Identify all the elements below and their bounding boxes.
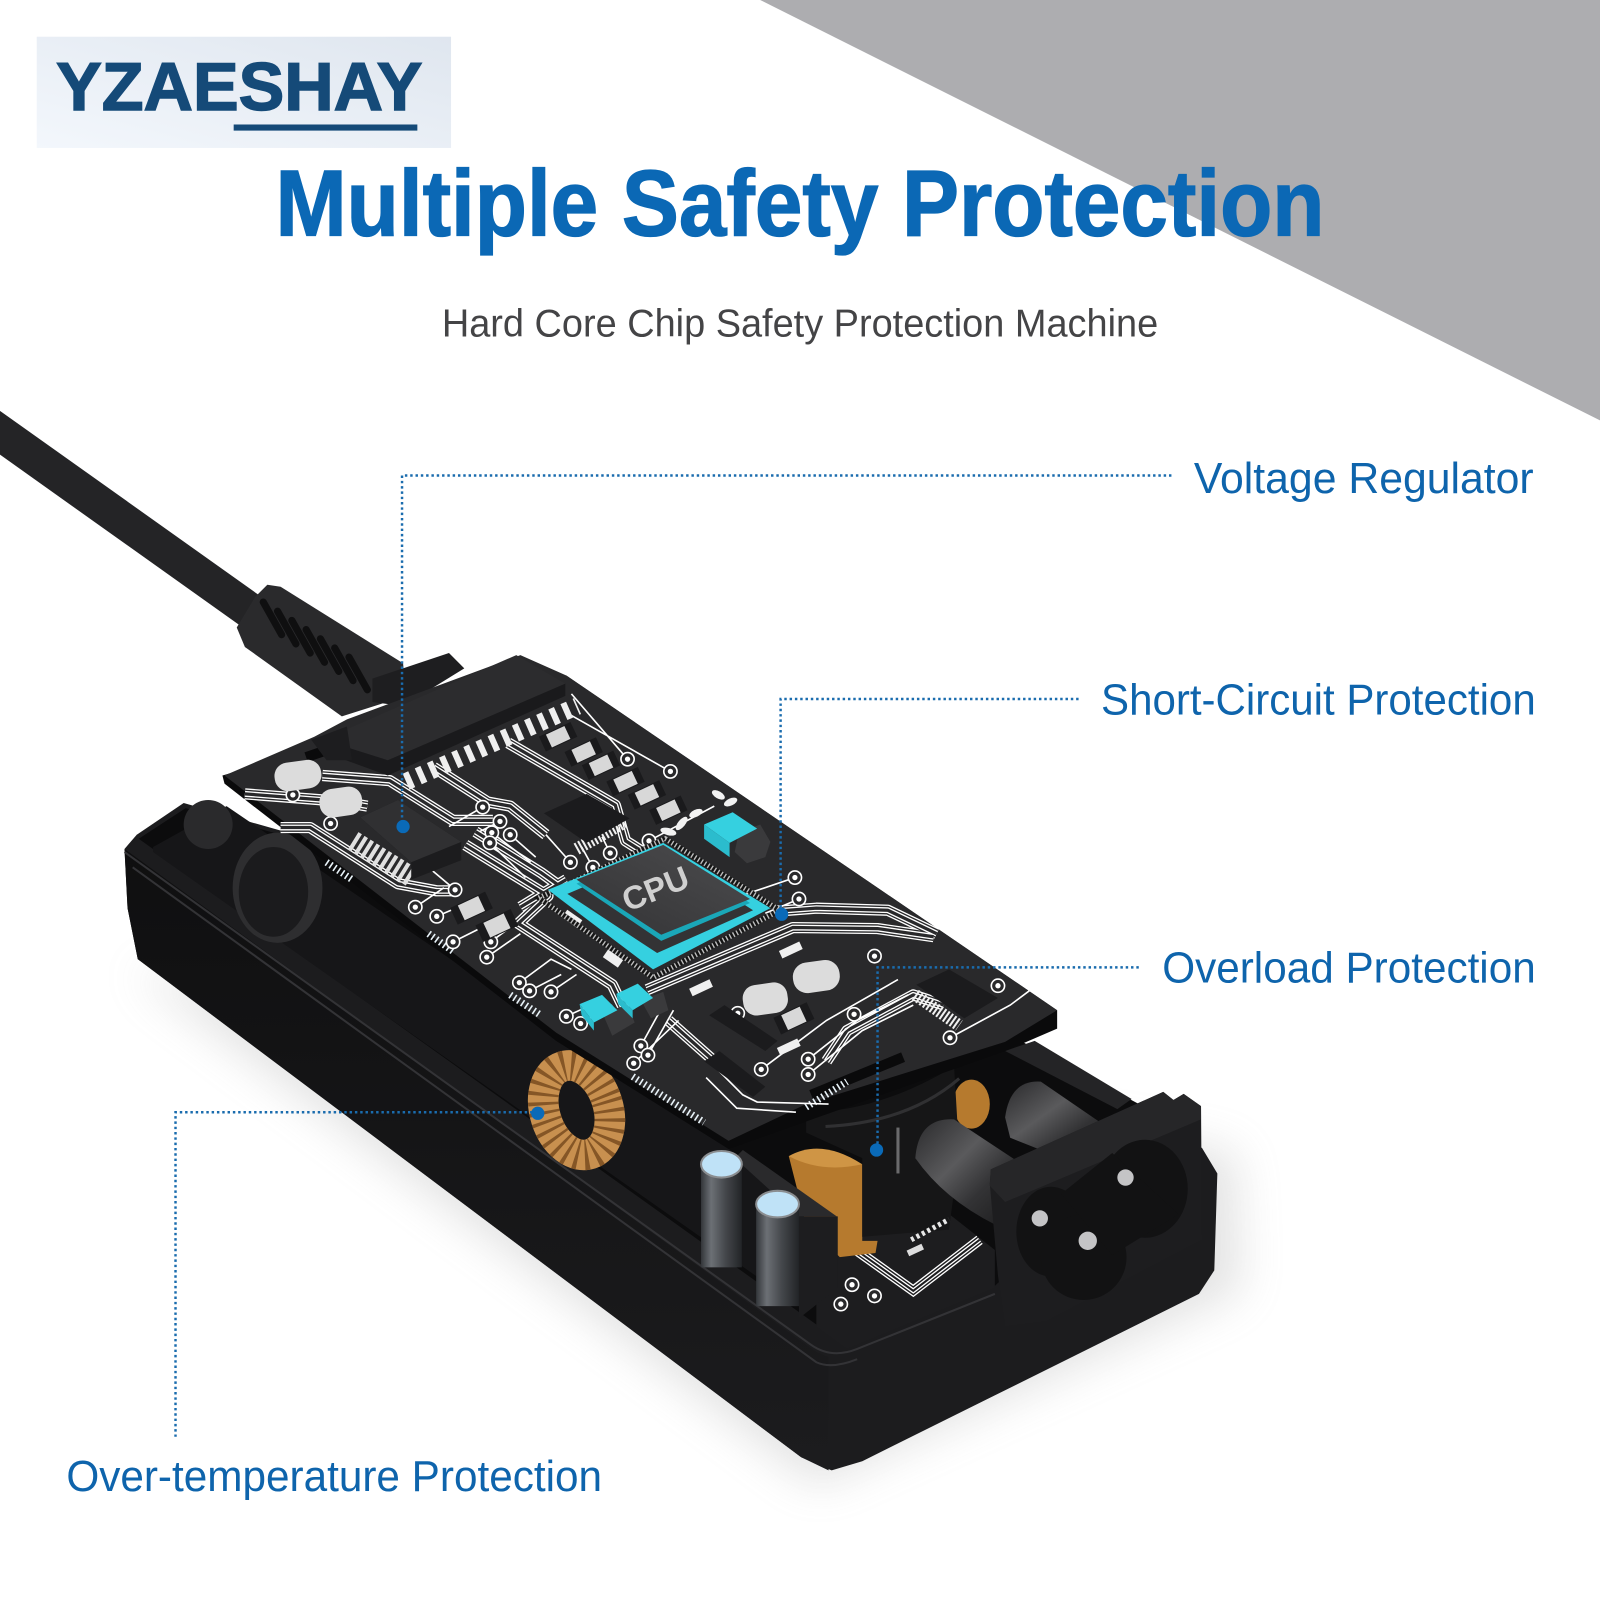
divider wall front — [799, 1216, 838, 1318]
socket pins — [1032, 1169, 1134, 1250]
circuit board top surface — [224, 655, 1057, 1141]
callout: voltage regulator: Voltage Regulator — [1194, 454, 1534, 503]
circuit board pads — [286, 753, 1005, 1081]
small white board pads — [562, 910, 803, 1055]
left tab on board — [311, 727, 352, 760]
subtitle: Hard Core Chip Safety Protection Machine — [442, 303, 1158, 346]
case rim line — [124, 852, 995, 1365]
case cavity — [139, 808, 1173, 1345]
bus traces on circuit board — [245, 743, 944, 1061]
device: power adapter cutaway — [0, 426, 1240, 1485]
adapter case body — [124, 803, 1217, 1470]
power cable — [0, 426, 255, 614]
electrolytic capacitors — [701, 1151, 799, 1306]
callout: overload protection: Overload Protection — [1162, 944, 1536, 993]
CPU label: CPU — [616, 858, 694, 919]
callout: short-circuit protection — [775, 675, 1536, 921]
main connector block — [346, 655, 578, 782]
case left face — [124, 849, 829, 1470]
low board components — [704, 1005, 778, 1097]
case inner wall — [153, 806, 806, 1311]
rear right case rail — [1005, 1041, 1132, 1109]
callout: over-temperature protection — [66, 1107, 602, 1501]
orange capacitor — [789, 1149, 878, 1257]
small surface mount parts left — [450, 892, 814, 1034]
background grey triangle — [760, 0, 1600, 420]
socket clover opening — [1016, 1140, 1188, 1300]
callout: voltage regulator — [396, 454, 1534, 833]
socket plate — [990, 1092, 1202, 1327]
lower board inside case — [816, 1194, 995, 1349]
small IC near CPU — [544, 794, 630, 849]
small IC right — [915, 969, 998, 1026]
surface mount capacitor row — [539, 722, 688, 825]
title: Multiple Safety Protection — [276, 151, 1324, 256]
board edge hatching — [327, 862, 847, 1122]
logo: YZAESHAY — [56, 50, 422, 125]
voltage regulator chip — [353, 800, 461, 880]
device shadow — [133, 969, 1240, 1485]
rear orange capacitor — [953, 1080, 990, 1129]
silver solder pads — [273, 758, 842, 1017]
rear socket cylinder — [1005, 1082, 1112, 1158]
single traces on circuit board — [415, 694, 1031, 1112]
copper toroid inductor — [532, 1057, 621, 1164]
large black cylinder — [806, 1066, 959, 1237]
cable strain relief — [237, 585, 406, 716]
connector tab — [372, 653, 464, 706]
front socket cylinder — [915, 1119, 1020, 1224]
callout: over-temperature protection: Over-temperature Protection — [66, 1452, 602, 1501]
white oval pads near cyan part — [660, 788, 739, 837]
small board parts — [907, 1219, 949, 1256]
CPU chip assembly — [539, 839, 780, 978]
board slots — [306, 745, 903, 1095]
cyan components — [580, 812, 770, 1036]
divider wall top — [735, 1150, 837, 1216]
rubber standoff — [184, 800, 233, 849]
logo — [37, 37, 451, 148]
round cylinder component — [233, 833, 322, 943]
circuit board edge — [222, 676, 1057, 1149]
callout: overload protection — [870, 944, 1536, 1157]
callout: short-circuit protection: Short-Circuit Protection — [1101, 675, 1536, 724]
